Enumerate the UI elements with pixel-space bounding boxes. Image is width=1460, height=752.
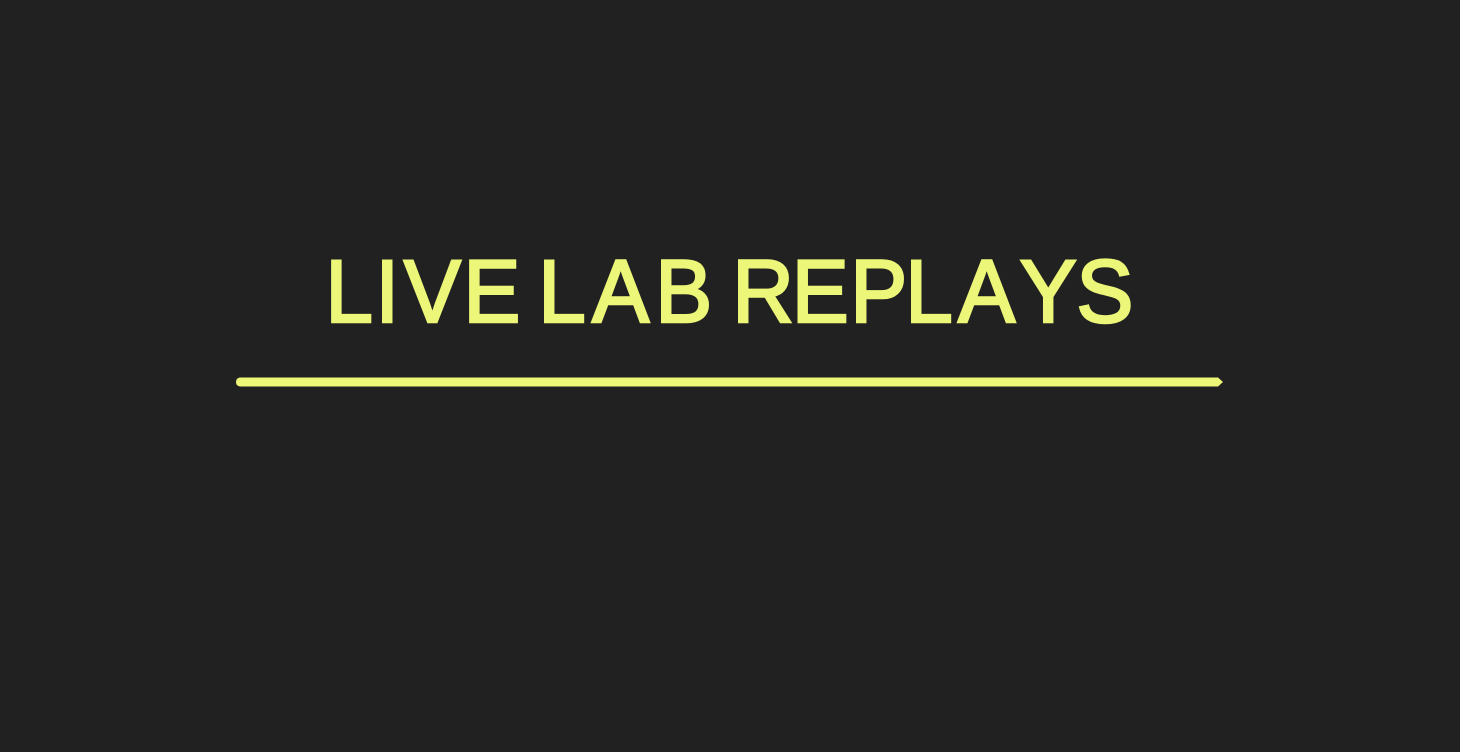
underline rule xyxy=(236,378,1223,386)
title: LIVE xyxy=(325,242,520,341)
title: REPLAYS xyxy=(732,242,1133,341)
title xyxy=(325,242,1133,341)
title: LAB xyxy=(538,242,712,341)
